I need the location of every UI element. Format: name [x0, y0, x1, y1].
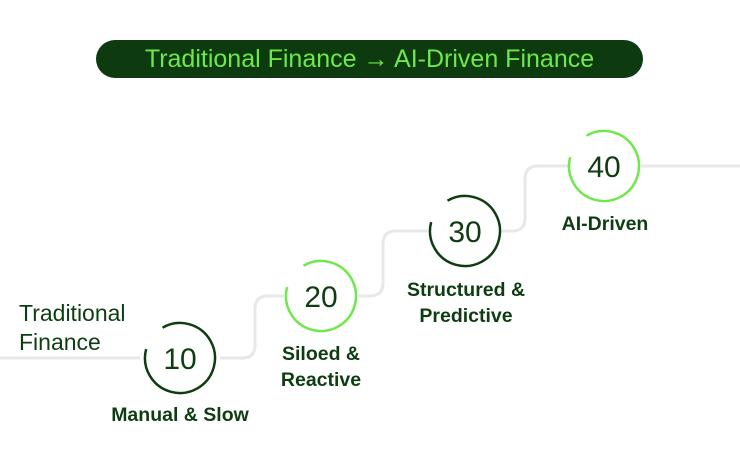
title pill: [96, 40, 643, 78]
circle 30: 30: [448, 216, 482, 249]
circle 10: [132, 310, 228, 406]
label: Siloed & Reactive: Reactive: [281, 369, 361, 391]
circle 40: 40: [587, 151, 621, 184]
circle 20: [273, 248, 369, 344]
label: Traditional Finance: [19, 300, 126, 355]
label: Siloed & Reactive: [281, 343, 361, 391]
label: Structured & Predictive: Structured &: [407, 279, 525, 301]
circle 40: [556, 118, 652, 214]
circle 20: 20: [304, 281, 338, 314]
circle 30: [417, 183, 513, 279]
label: AI-Driven: AI-Driven: [562, 213, 648, 235]
label: Traditional Finance: Finance: [19, 329, 101, 355]
label: Siloed & Reactive: Siloed &: [282, 343, 360, 365]
label: Traditional Finance: Traditional: [19, 300, 126, 326]
label: Structured & Predictive: Predictive: [419, 305, 513, 327]
label: Structured & Predictive: [407, 279, 525, 327]
label: Manual & Slow: Manual & Slow: [111, 404, 249, 426]
circle 10: 10: [163, 343, 197, 376]
title pill: Traditional Finance → AI-Driven Finance: [145, 45, 594, 73]
